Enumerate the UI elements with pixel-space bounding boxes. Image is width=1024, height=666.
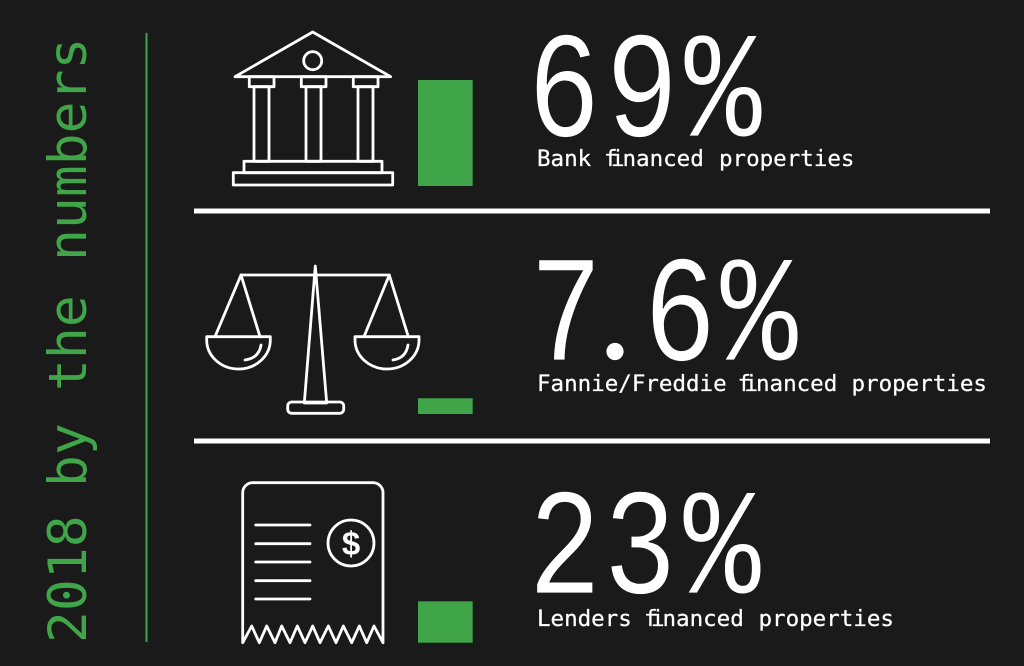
title: 2018 by the numbers: 2018 xyxy=(38,515,99,643)
title: 2018 by the numbers: the xyxy=(38,295,99,391)
label: lenders financed properties: i xyxy=(651,606,665,632)
bar: 7.6% xyxy=(418,398,473,414)
bar: 23% xyxy=(418,601,473,643)
title: 2018 by the numbers: numbers xyxy=(38,38,99,261)
label: fannie/freddie financed properties: f xyxy=(738,371,751,397)
label: lenders financed properties: properties xyxy=(758,606,894,632)
label: bank financed properties: i xyxy=(611,146,625,172)
label: bank financed properties: Bank xyxy=(537,146,605,172)
label: lenders financed properties: Lenders xyxy=(537,606,645,632)
label: bank financed properties: nanced xyxy=(622,146,704,172)
label: fannie/freddie financed properties: properties xyxy=(852,371,987,397)
icon: bank xyxy=(233,32,393,185)
icon: dollar sign: $ xyxy=(342,525,360,562)
stat: 69% xyxy=(528,10,762,182)
stat: 7.6%: % xyxy=(720,235,798,406)
stat: 23%: % xyxy=(683,468,761,639)
label: fannie/freddie financed properties: i xyxy=(744,371,758,397)
stat: 69%: % xyxy=(684,11,762,182)
stat: 7.6%: 6 xyxy=(644,234,716,406)
bar: 69% xyxy=(418,80,473,186)
icon: receipt xyxy=(243,483,383,643)
title: 2018 by the numbers: by xyxy=(38,423,99,487)
stat: 69%: 69 xyxy=(528,10,678,182)
stat: 23% xyxy=(528,467,761,639)
label: fannie/freddie financed properties: nanced xyxy=(756,371,837,397)
stat: 7.6%: . xyxy=(593,283,637,385)
label: bank financed properties: f xyxy=(604,146,618,172)
stat: 7.6% xyxy=(530,234,798,406)
label: lenders financed properties: f xyxy=(644,606,658,632)
stat: 7.6%: 7 xyxy=(530,234,602,406)
label: lenders financed properties: nanced xyxy=(662,606,744,632)
icon: scales xyxy=(207,266,419,413)
label: fannie/freddie financed properties: Fannie/Freddie xyxy=(537,371,740,397)
stat: 23%: 23 xyxy=(528,467,676,639)
label: bank financed properties: properties xyxy=(719,146,854,172)
